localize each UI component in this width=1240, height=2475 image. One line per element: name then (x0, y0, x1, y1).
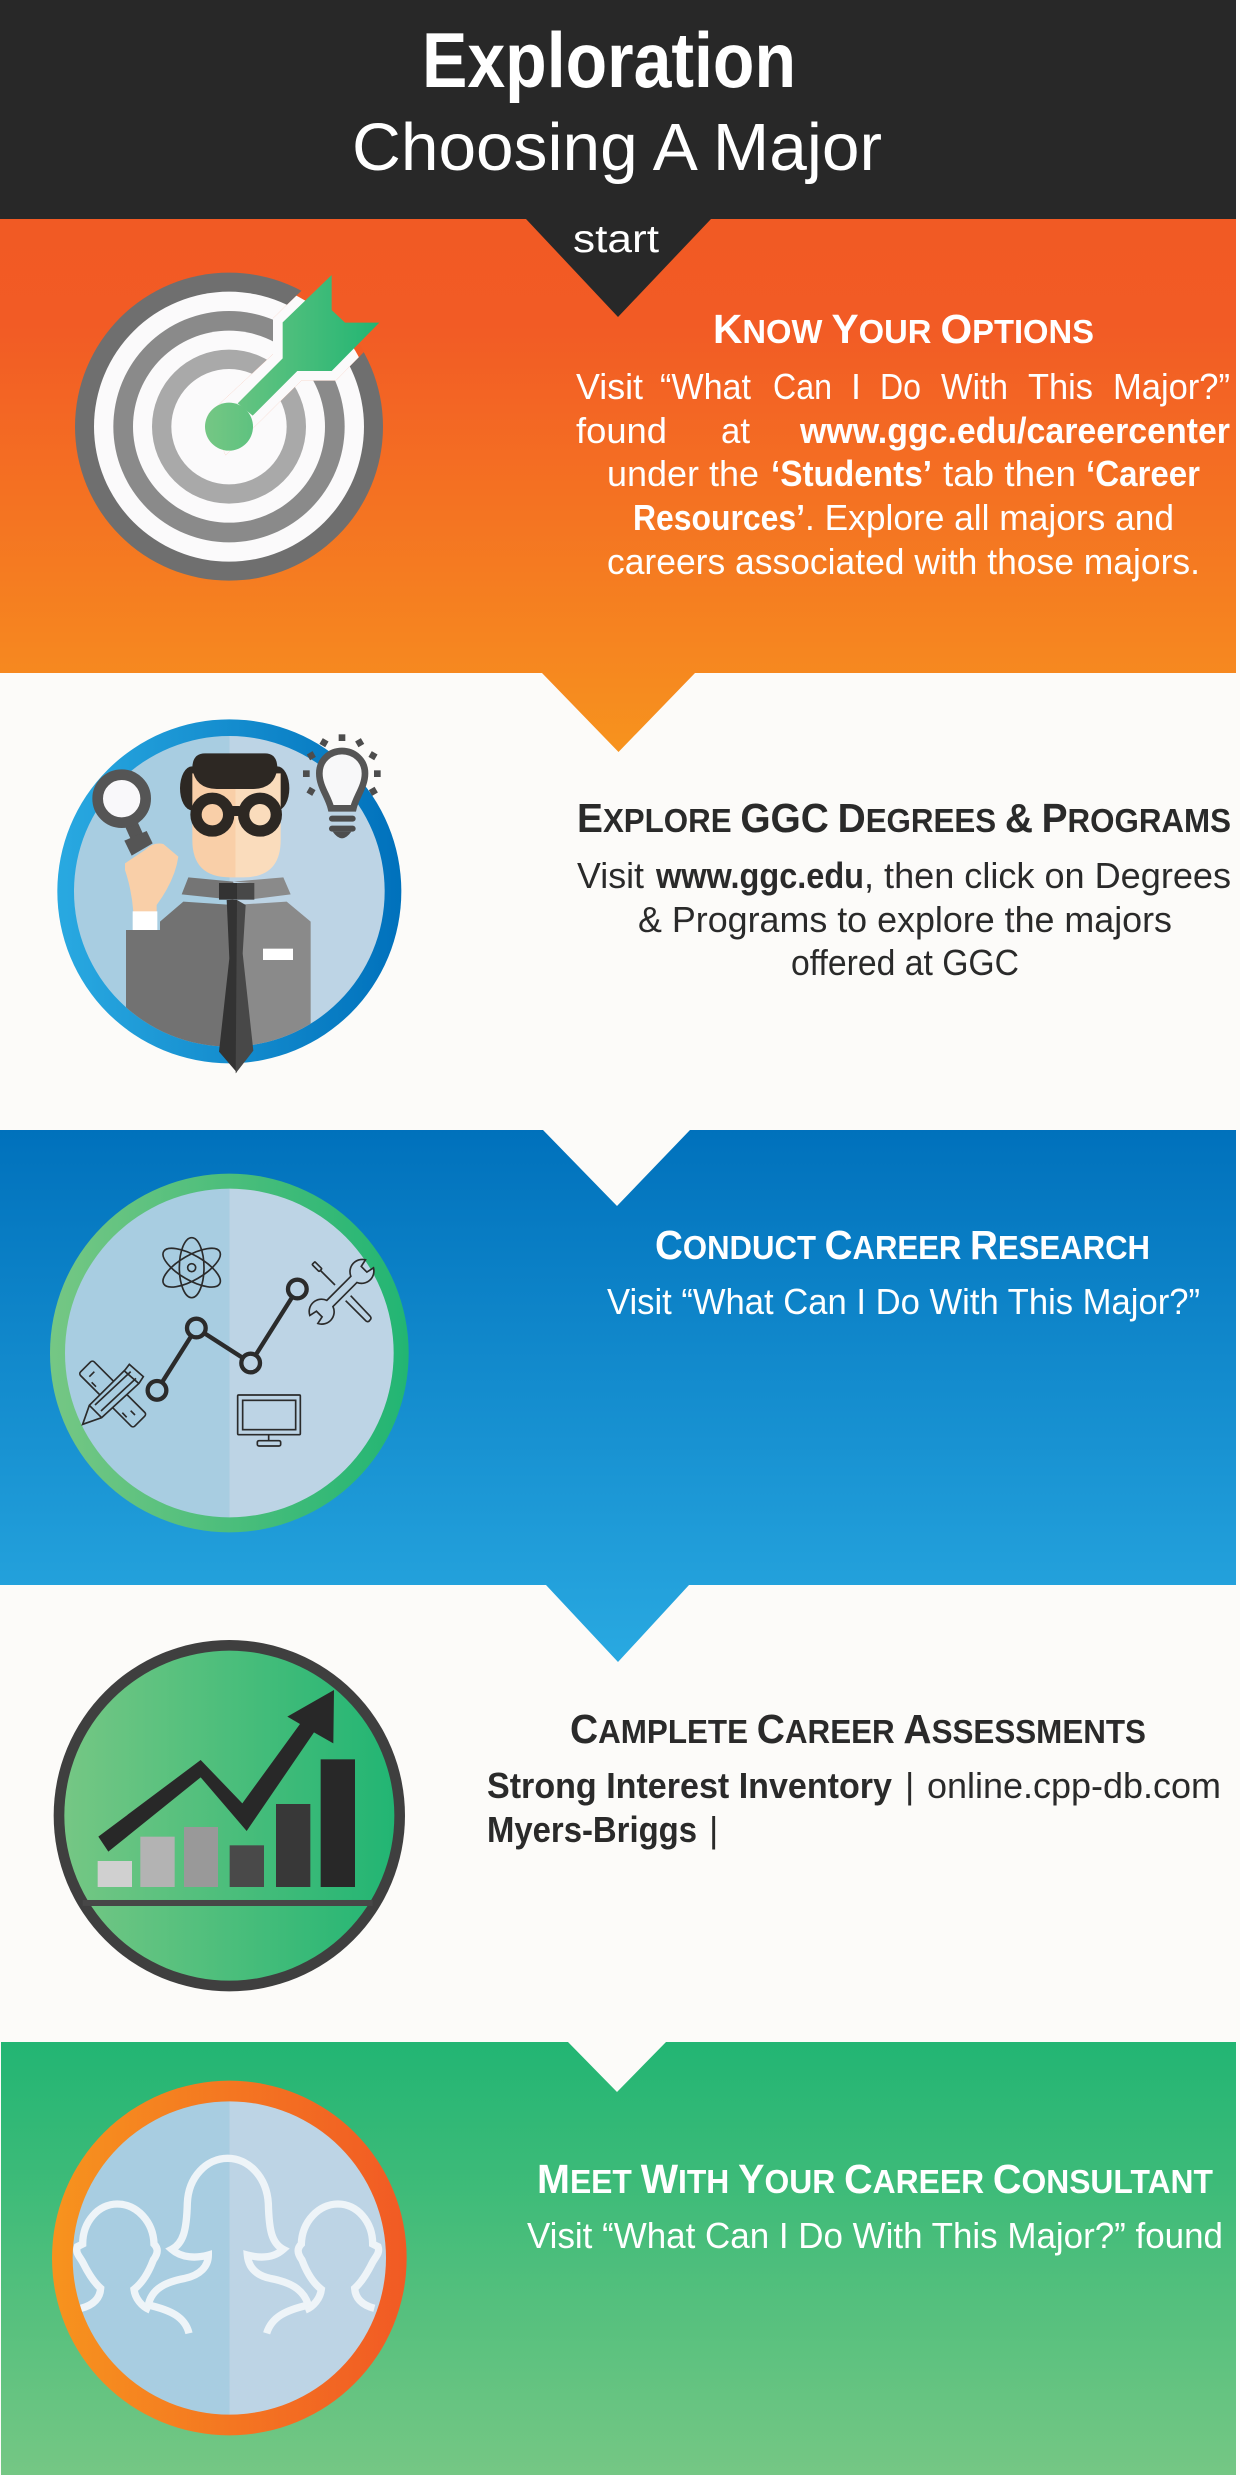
heading: conduct career research: CONDUCT CAREER RESEARCH (655, 1222, 1150, 1268)
heading: camplete career assessments: CAMPLETE CAREER ASSESSMENTS (570, 1706, 1146, 1752)
text: assessments list (487, 1765, 1221, 1850)
text: assessments list: | (709, 1809, 718, 1850)
panel: explore degrees background (0, 673, 1240, 1133)
panel: meet with your career consultant (1, 2042, 1236, 2475)
text: know your options body: careers associated with those majors. (607, 541, 1200, 582)
text: know your options body: Can (773, 366, 832, 407)
heading: meet with your career consultant: MEET WITH YOUR CAREER CONSULTANT (537, 2156, 1213, 2202)
orange background with arrow tab (0, 219, 1236, 752)
text: know your options body: Major?” (1113, 366, 1230, 407)
green background with notch (1, 2042, 1236, 2475)
text: know your options body: ‘Career (1086, 453, 1200, 494)
text: know your options body: Visit (576, 366, 643, 407)
text: conduct career research body: Visit “What Can I Do With This Major?” (607, 1281, 1200, 1322)
panel: explore degrees content (57, 719, 1231, 1073)
icon: rising bar chart (54, 1640, 405, 1991)
panel: know your options (0, 219, 1236, 752)
start label: start (573, 218, 659, 261)
panel: complete career assessments (54, 1640, 1221, 1991)
panel: header (0, 0, 1236, 317)
text: know your options body: under the (607, 453, 759, 494)
heading: explore ggc degrees and programs: EXPLORE GGC DEGREES & PROGRAMS (577, 795, 1231, 841)
icon: three people outlines (52, 2081, 407, 2435)
text: explore degrees body (577, 855, 1231, 983)
text: know your options body: tab then (943, 453, 1076, 494)
text: know your options body: . Explore all majors and (805, 497, 1174, 538)
text: know your options body: Do (880, 366, 921, 407)
text: know your options body: at (721, 410, 750, 451)
heading: know your options: KNOW YOUR OPTIONS (713, 306, 1094, 352)
icon: researcher with magnifier and light bulb (57, 719, 401, 1073)
text: know your options body: Resources’ (633, 497, 805, 538)
text: know your options body (576, 366, 1230, 582)
text: know your options body: I (851, 366, 861, 407)
panel: conduct career research (0, 1130, 1236, 1662)
text: explore degrees body: www.ggc.edu (655, 855, 864, 896)
text: know your options body: This (1028, 366, 1093, 407)
blue background with notch and arrow tab (0, 1130, 1236, 1662)
text: know your options body: ‘Students’ (771, 453, 932, 494)
text: assessments list: | (905, 1765, 914, 1806)
text: know your options body: “What (660, 366, 751, 407)
text: meet with consultant body: Visit “What Can I Do With This Major?” found (527, 2215, 1223, 2256)
text: know your options body: found (576, 410, 667, 451)
subtitle: Choosing A Major (352, 110, 882, 185)
text: assessments list: Myers-Briggs (487, 1809, 697, 1850)
text: explore degrees body: offered at GGC (791, 942, 1019, 983)
text: explore degrees body: Visit (577, 855, 644, 896)
header background with start tab (0, 0, 1236, 317)
title: Exploration (422, 16, 796, 104)
text: assessments list: online.cpp-db.com (927, 1765, 1221, 1806)
text: know your options body: With (941, 366, 1008, 407)
icon: target with dart (75, 273, 383, 581)
text: assessments list: Strong Interest Inventory (487, 1765, 892, 1806)
text: explore degrees body: & Programs to explore the majors (638, 899, 1172, 940)
text: explore degrees body: , then click on Degrees (864, 855, 1231, 896)
icon: career research line chart and tools (50, 1174, 409, 1532)
